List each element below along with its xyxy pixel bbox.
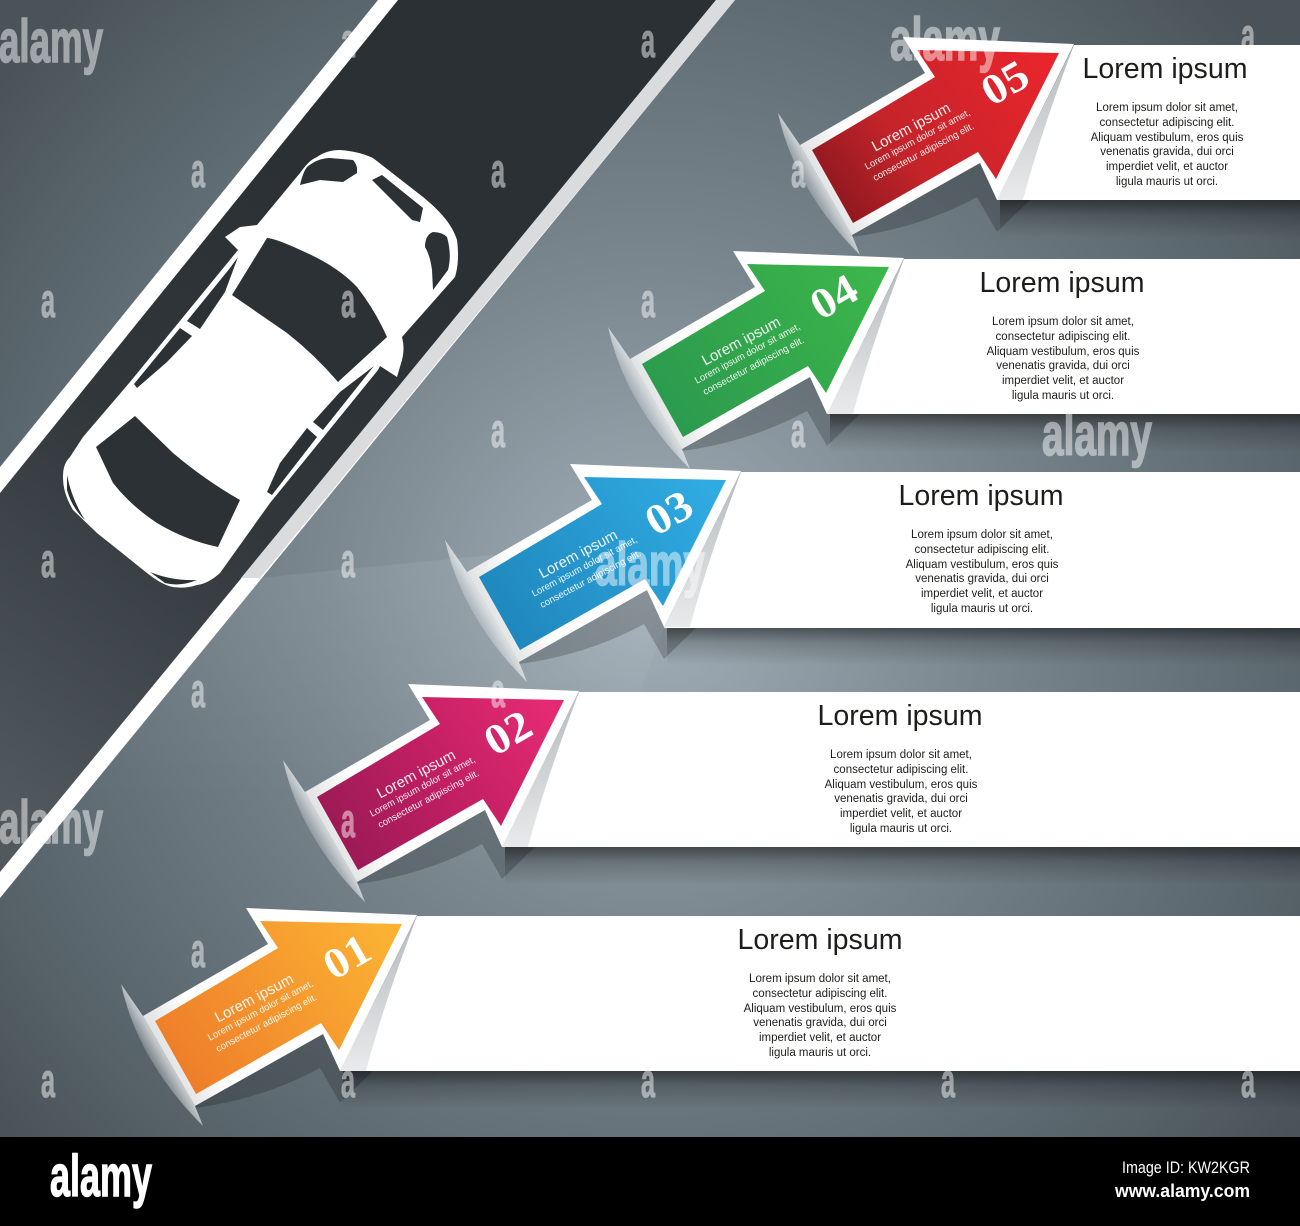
arrow 03 cast shadow xyxy=(519,590,697,664)
watermarks: a xyxy=(191,405,205,458)
panel 05 text xyxy=(1082,53,1248,188)
image id: Image ID: KW2KGR xyxy=(1122,1158,1250,1177)
step 03: blue arrow and panel xyxy=(445,464,1300,682)
panel 04 text: venenatis gravida, dui orci xyxy=(996,360,1130,372)
footer url: www.alamy.com xyxy=(1114,1181,1250,1201)
panel 05 xyxy=(997,45,1300,200)
fold flap 02 xyxy=(283,760,365,902)
panel 05 text: Aliquam vestibulum, eros quis xyxy=(1091,132,1244,144)
step 04: green arrow and panel xyxy=(608,251,1300,469)
panel 02 text: Aliquam vestibulum, eros quis xyxy=(825,779,978,791)
fold flap 05 xyxy=(778,113,860,255)
panel 04 text: Aliquam vestibulum, eros quis xyxy=(987,346,1140,358)
watermarks: a xyxy=(191,925,205,978)
panel 03 text: venenatis gravida, dui orci xyxy=(915,573,1049,585)
arrow 05: 05 xyxy=(973,51,1037,116)
arrow 04: consectetur adipiscing elit. xyxy=(701,335,806,398)
fold flap 03 xyxy=(445,540,527,682)
panel 04 text: imperdiet velit, et auctor xyxy=(1002,375,1124,387)
panel 01 text: imperdiet velit, et auctor xyxy=(759,1032,881,1044)
arrow 02: consectetur adipiscing elit. xyxy=(376,768,481,831)
arrow 03: consectetur adipiscing elit. xyxy=(538,548,643,611)
watermarks: alamy xyxy=(0,789,103,856)
panel 03 text: ligula mauris ut orci. xyxy=(931,603,1033,615)
arrow 02: 02 xyxy=(476,701,540,766)
panel 04 xyxy=(827,259,1300,414)
arrow 01 cast shadow xyxy=(195,1034,373,1108)
arrow 04: Lorem ipsum dolor sit amet, xyxy=(693,321,802,386)
panel 03 shadow xyxy=(667,627,1300,665)
arrow 04: 04 xyxy=(802,265,866,330)
panel 01 text: Lorem ipsum dolor sit amet, xyxy=(749,973,891,985)
panel 04 text: ligula mauris ut orci. xyxy=(1012,390,1114,402)
panel 02 text: Lorem ipsum xyxy=(818,700,982,732)
panel 04 text xyxy=(980,267,1144,402)
arrow 05 cast shadow xyxy=(852,163,1030,237)
panel 03 text: Lorem ipsum dolor sit amet, xyxy=(911,529,1053,541)
arrow 02: Lorem ipsum dolor sit amet, xyxy=(368,754,477,819)
arrow 01: consectetur adipiscing elit. xyxy=(214,992,319,1055)
panel 01 text xyxy=(738,924,902,1059)
fold flap 01 xyxy=(121,984,203,1126)
watermarks: a xyxy=(191,665,205,718)
arrow 01: 01 xyxy=(315,925,379,990)
arrow 03: Lorem ipsum xyxy=(536,527,621,582)
background light band xyxy=(78,536,700,800)
watermarks: a xyxy=(41,535,55,588)
watermarks: a xyxy=(341,795,355,848)
arrow 01: Lorem ipsum xyxy=(212,971,297,1026)
arrow 05: Lorem ipsum xyxy=(869,100,954,155)
panel 02 text: Lorem ipsum dolor sit amet, xyxy=(830,749,972,761)
watermarks: a xyxy=(341,275,355,328)
watermarks: a xyxy=(641,15,655,68)
watermarks: alamy xyxy=(595,531,705,598)
arrow 01 xyxy=(143,908,417,1106)
watermarks: a xyxy=(41,275,55,328)
watermarks: a xyxy=(341,1055,355,1108)
panel 05 text: Lorem ipsum dolor sit amet, xyxy=(1096,102,1238,114)
watermarks: alamy xyxy=(0,8,103,75)
step 02: magenta arrow and panel xyxy=(283,684,1300,902)
panel 02 text: venenatis gravida, dui orci xyxy=(834,793,968,805)
watermarks: a xyxy=(791,145,805,198)
panel 03 xyxy=(664,472,1300,628)
arrow 04: Lorem ipsum xyxy=(699,314,784,369)
arrow 05: consectetur adipiscing elit. xyxy=(871,121,976,184)
panel 01 text: Aliquam vestibulum, eros quis xyxy=(744,1003,897,1015)
panel fold 01 xyxy=(340,916,417,1071)
panel 03 text: Aliquam vestibulum, eros quis xyxy=(906,559,1059,571)
watermarks: a xyxy=(491,145,505,198)
panel 05 text: imperdiet velit, et auctor xyxy=(1106,161,1228,173)
panel 02 xyxy=(502,692,1300,847)
arrow 05: Lorem ipsum dolor sit amet, xyxy=(863,107,972,172)
arrow 05 xyxy=(800,37,1074,235)
arrow 03 xyxy=(467,464,741,662)
panel 04 text: Lorem ipsum dolor sit amet, xyxy=(992,316,1134,328)
panel 02 text: ligula mauris ut orci. xyxy=(850,823,952,835)
watermarks: a xyxy=(341,535,355,588)
watermarks: alamy xyxy=(890,6,1000,73)
arrow 01: Lorem ipsum dolor sit amet, xyxy=(206,978,315,1043)
watermarks: a xyxy=(341,15,355,68)
panel 05 text: Lorem ipsum xyxy=(1082,53,1248,85)
watermarks: alamy xyxy=(1042,401,1152,468)
panel 02 text: imperdiet velit, et auctor xyxy=(840,808,962,820)
arrow 02 xyxy=(305,684,579,882)
footer bar xyxy=(0,1137,1300,1226)
arrow 03: Lorem ipsum dolor sit amet, xyxy=(530,534,639,599)
watermarks: a xyxy=(791,405,805,458)
car xyxy=(63,150,458,588)
road xyxy=(0,0,735,898)
watermarks: a xyxy=(491,665,505,718)
watermarks: a xyxy=(1241,10,1255,63)
watermarks: a xyxy=(191,145,205,198)
watermarks: a xyxy=(1241,275,1255,328)
panel 03 text: imperdiet velit, et auctor xyxy=(921,588,1043,600)
panel fold 04 xyxy=(827,259,904,414)
panel 01 xyxy=(340,916,1300,1071)
fold flap 04 xyxy=(608,327,690,469)
watermarks: a xyxy=(941,275,955,328)
footer logo: alamy xyxy=(50,1144,152,1209)
panel 04 shadow xyxy=(830,414,1300,452)
step 01: orange arrow and panel xyxy=(121,908,1300,1126)
watermarks: a xyxy=(941,1055,955,1108)
arrow 04 xyxy=(630,251,904,449)
panel 01 text: ligula mauris ut orci. xyxy=(769,1047,871,1059)
panel fold 02 xyxy=(502,692,579,847)
panel 01 text: Lorem ipsum xyxy=(738,924,902,956)
watermarks: a xyxy=(641,1055,655,1108)
panel 03 text xyxy=(898,480,1064,615)
watermarks: a xyxy=(641,275,655,328)
panel 01 shadow xyxy=(343,1071,1300,1109)
panel fold 03 xyxy=(664,472,741,627)
panel 01 text: consectetur adipiscing elit. xyxy=(753,988,887,1000)
panel 05 text: ligula mauris ut orci. xyxy=(1116,176,1218,188)
arrow 02: Lorem ipsum xyxy=(374,747,459,802)
panel 03 text: Lorem ipsum xyxy=(898,480,1064,512)
panel 01 text: venenatis gravida, dui orci xyxy=(753,1017,887,1029)
panel 05 shadow xyxy=(1000,200,1300,238)
arrow 03: 03 xyxy=(637,481,701,546)
watermarks: a xyxy=(1241,1055,1255,1108)
watermarks: a xyxy=(491,405,505,458)
step 05: red arrow and panel xyxy=(778,37,1300,255)
panel 04 text: Lorem ipsum xyxy=(980,267,1144,299)
panel 05 text: consectetur adipiscing elit. xyxy=(1100,117,1234,129)
panel 04 text: consectetur adipiscing elit. xyxy=(996,331,1130,343)
panel 05 text: venenatis gravida, dui orci xyxy=(1100,146,1234,158)
arrow 02 cast shadow xyxy=(357,810,535,884)
panel 03 text: consectetur adipiscing elit. xyxy=(915,544,1049,556)
watermarks: a xyxy=(41,1055,55,1108)
panel 02 shadow xyxy=(505,847,1300,885)
panel 02 text: consectetur adipiscing elit. xyxy=(834,764,968,776)
panel 02 text xyxy=(818,700,982,835)
panel fold 05 xyxy=(997,45,1074,200)
arrow 04 cast shadow xyxy=(682,377,860,451)
